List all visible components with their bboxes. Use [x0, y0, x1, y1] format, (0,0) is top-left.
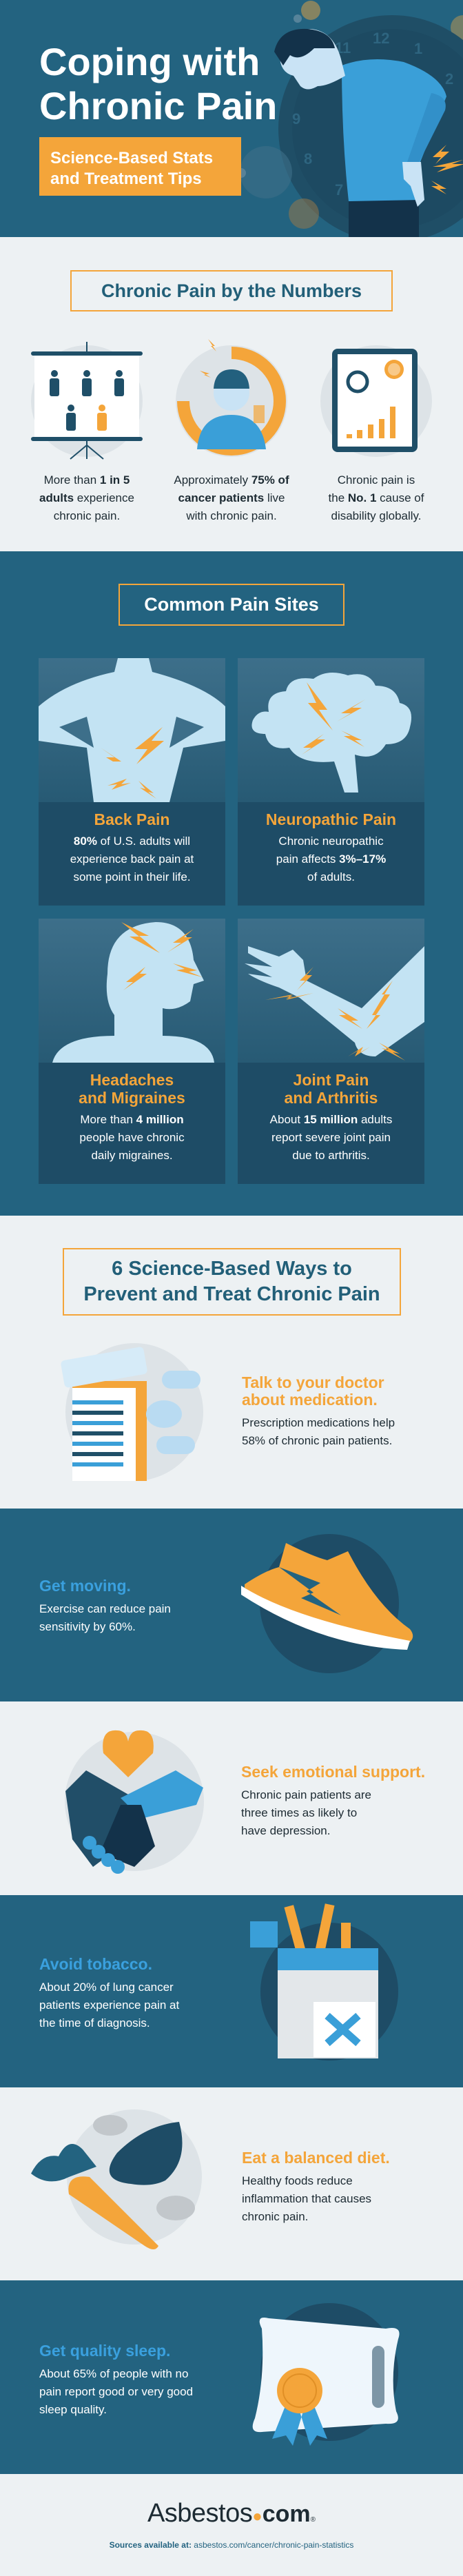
card: joint pain and arthritis: About 15 million adults [270, 1113, 392, 1126]
card: headaches and migraines: people have chronic [79, 1131, 185, 1144]
header illustration: man with back pain and clock: 1 [414, 40, 422, 57]
header banner [0, 0, 463, 237]
stat: 75% [174, 473, 289, 522]
pants [349, 200, 419, 237]
heading: Chronic Pain by the Numbers [101, 280, 362, 300]
section: tip 2 get moving [0, 1509, 463, 1701]
logo: Asbestos●com® [147, 2499, 316, 2528]
stat: 1 in 5: adults experience [39, 491, 134, 504]
card: headaches and migraines [39, 919, 225, 1184]
tip 4 text: About 20% of lung cancer [39, 1981, 174, 1994]
icon: medication bottle and pills [61, 1343, 203, 1481]
icon: clipboard with chart [320, 345, 432, 457]
footer [0, 2474, 463, 2576]
tip 1 text [242, 1373, 395, 1447]
tip 4 text [39, 1955, 179, 2030]
tip 4 text: patients experience pain at [39, 1999, 179, 2012]
stat: No. 1: Chronic pain is [338, 473, 415, 487]
stat: No. 1 [328, 473, 424, 522]
card: neuropathic pain: Neuropathic Pain [266, 810, 396, 828]
tip 2 text: sensitivity by 60%. [39, 1620, 136, 1633]
heading [70, 270, 393, 311]
subtitle badge: Science-Based Stats [50, 149, 213, 167]
stat: No. 1: the No. 1 cause of [329, 491, 424, 504]
tip 6 text: Get quality sleep. [39, 2342, 170, 2360]
title: Coping with [39, 40, 260, 83]
torso [342, 59, 446, 201]
tip 3 text: three times as likely to [241, 1806, 357, 1819]
icon: cigarette pack [250, 1903, 398, 2061]
card: joint pain and arthritis: Joint Pain [294, 1071, 369, 1089]
card: headaches and migraines: and Migraines [79, 1089, 185, 1107]
stat: No. 1: disability globally. [331, 509, 422, 522]
card: neuropathic pain: pain affects 3%–17% [276, 852, 386, 866]
card: back pain [39, 658, 225, 906]
tip 3 text: Chronic pain patients are [241, 1788, 371, 1801]
section: tip 4 avoid tobacco [0, 1895, 463, 2087]
icon: cancer patient with ring [176, 339, 287, 457]
tip 5 text: chronic pain. [242, 2210, 308, 2223]
stat: 75%: cancer patients live [178, 491, 285, 504]
stat: 75%: Approximately 75% of [174, 473, 289, 487]
tip 3 text [241, 1763, 425, 1837]
card: back pain: 80% of U.S. adults will [74, 835, 190, 848]
stat: 1 in 5: More than 1 in 5 [44, 473, 130, 487]
heading [119, 584, 344, 626]
heading: Common Pain Sites [144, 594, 319, 615]
card: headaches and migraines: daily migraines. [91, 1149, 173, 1162]
section: tip 6 sleep [0, 2280, 463, 2474]
card: joint pain and arthritis: report severe joint pain [271, 1131, 391, 1144]
head [280, 29, 345, 90]
tip 4 text: Avoid tobacco. [39, 1955, 152, 1973]
icon: presentation board [31, 342, 143, 460]
stat: 1 in 5: chronic pain. [54, 509, 120, 522]
tip 5 text: Healthy foods reduce [242, 2174, 353, 2187]
header illustration: man with back pain and clock: 2 [445, 70, 453, 88]
hand [402, 162, 424, 207]
icon: handshake with heart [65, 1730, 204, 1874]
section: chronic pain by the numbers [0, 237, 463, 551]
card: joint pain and arthritis: due to arthritis. [292, 1149, 370, 1162]
tip 1 text: Talk to your doctor [242, 1373, 384, 1391]
section: tip 3 emotional support [0, 1701, 463, 1895]
tip 6 text [39, 2342, 193, 2416]
tip 2 text: Get moving. [39, 1577, 131, 1595]
card: neuropathic pain: Chronic neuropathic [278, 835, 384, 848]
header illustration: man with back pain and clock: 7 [335, 181, 343, 198]
tip 2 text [39, 1577, 171, 1633]
tip 1 text: about medication. [242, 1391, 378, 1409]
card: back pain: Back Pain [94, 810, 169, 828]
tip 3 text: Seek emotional support. [241, 1763, 425, 1781]
heading [63, 1248, 401, 1316]
heading: 6 Science-Based Ways to [112, 1258, 352, 1280]
title: Chronic Pain [39, 84, 277, 127]
card: back pain: experience back pain at [70, 852, 194, 866]
tip 6 text: sleep quality. [39, 2403, 107, 2416]
card: headaches and migraines: Headaches [90, 1071, 174, 1089]
card: neuropathic pain: of adults. [307, 870, 355, 883]
section: tip 5 balanced diet [0, 2087, 463, 2280]
tip 4 text: the time of diagnosis. [39, 2016, 150, 2030]
stat: 75%: with chronic pain. [186, 509, 277, 522]
tip 5 text: inflammation that causes [242, 2192, 371, 2205]
tip 5 text: Eat a balanced diet. [242, 2149, 390, 2167]
card: joint pain and arthritis: and Arthritis [285, 1089, 378, 1107]
tip 5 text [242, 2149, 390, 2223]
header illustration: man with back pain and clock: 8 [304, 150, 312, 167]
subtitle badge: and Treatment Tips [50, 170, 202, 188]
tip 1 text: 58% of chronic pain patients. [242, 1434, 392, 1447]
tip 1 text: Prescription medications help [242, 1416, 395, 1429]
section: common pain sites [0, 551, 463, 1216]
header illustration: man with back pain and clock: 12 [373, 30, 389, 47]
stat: 1 in 5 [39, 473, 134, 522]
icon: vegetables plate [31, 2109, 202, 2249]
tip 6 text: pain report good or very good [39, 2385, 193, 2398]
title [39, 40, 277, 127]
sources: Sources available at: asbestos.com/cancer/chronic-pain-statistics [110, 2540, 353, 2550]
icon: pillow with ribbon award [252, 2303, 400, 2446]
header illustration: man with back pain and clock: 11 [335, 39, 351, 57]
card: joint pain and arthritis [238, 919, 424, 1184]
icon: running shoe [241, 1534, 413, 1673]
card: neuropathic pain [238, 658, 424, 906]
header illustration: man with back pain and clock: 9 [292, 110, 300, 127]
card: headaches and migraines: More than 4 million [80, 1113, 184, 1126]
subtitle badge [39, 137, 241, 196]
tip 3 text: have depression. [241, 1824, 330, 1837]
section: 6 ways heading + tip 1 [0, 1216, 463, 1509]
tip 6 text: About 65% of people with no [39, 2367, 188, 2380]
heading: Prevent and Treat Chronic Pain [83, 1283, 380, 1305]
card: back pain: some point in their life. [73, 870, 191, 883]
tip 2 text: Exercise can reduce pain [39, 1602, 171, 1615]
header illustration: man with back pain and clock [241, 1, 463, 237]
